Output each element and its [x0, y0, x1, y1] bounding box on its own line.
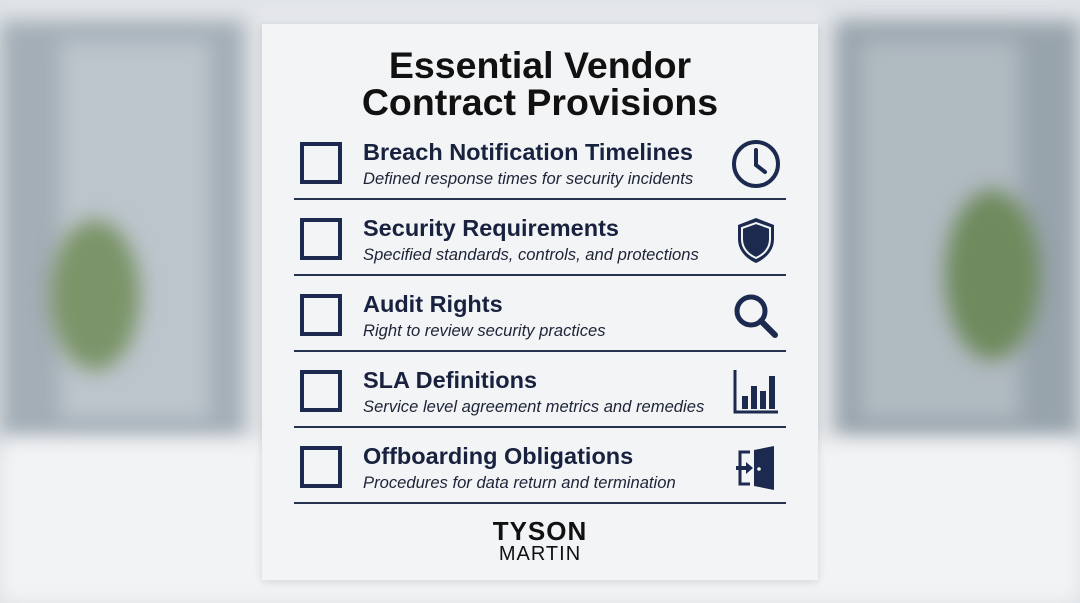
card: [262, 24, 818, 580]
title: Contract Provisions: [362, 81, 718, 123]
title: Essential Vendor: [389, 44, 691, 86]
row: SLA definitions: Service level agreement metrics and remedies: [363, 397, 704, 416]
row: audit rights: [294, 276, 786, 352]
icon: exit door: [736, 446, 774, 490]
icon: magnifier: [734, 294, 778, 338]
icon: shield: [738, 218, 774, 263]
row: security requirements: Specified standards, controls, and protections: [363, 245, 699, 264]
row: security requirements: [294, 200, 786, 276]
row: audit rights: Audit Rights: [363, 291, 503, 317]
row: breach notification: [294, 124, 786, 200]
row: security requirements: Security Requirements: [363, 215, 619, 241]
title: [362, 44, 718, 123]
row: audit rights: Right to review security practices: [363, 321, 606, 340]
logo: TYSON: [493, 516, 587, 546]
logo: MARTIN: [499, 543, 581, 565]
row: breach notification: Breach Notification Timelines: [363, 139, 693, 165]
logo: [493, 516, 587, 565]
row: SLA definitions: [294, 352, 786, 428]
icon: clock: [732, 140, 780, 188]
row: breach notification: Defined response times for security incidents: [363, 169, 693, 188]
row: offboarding: Offboarding Obligations: [363, 443, 633, 469]
row: offboarding: Procedures for data return and termination: [363, 473, 676, 492]
row: offboarding: [294, 428, 786, 504]
row: SLA definitions: SLA Definitions: [363, 367, 537, 393]
icon: bar chart: [734, 370, 778, 414]
